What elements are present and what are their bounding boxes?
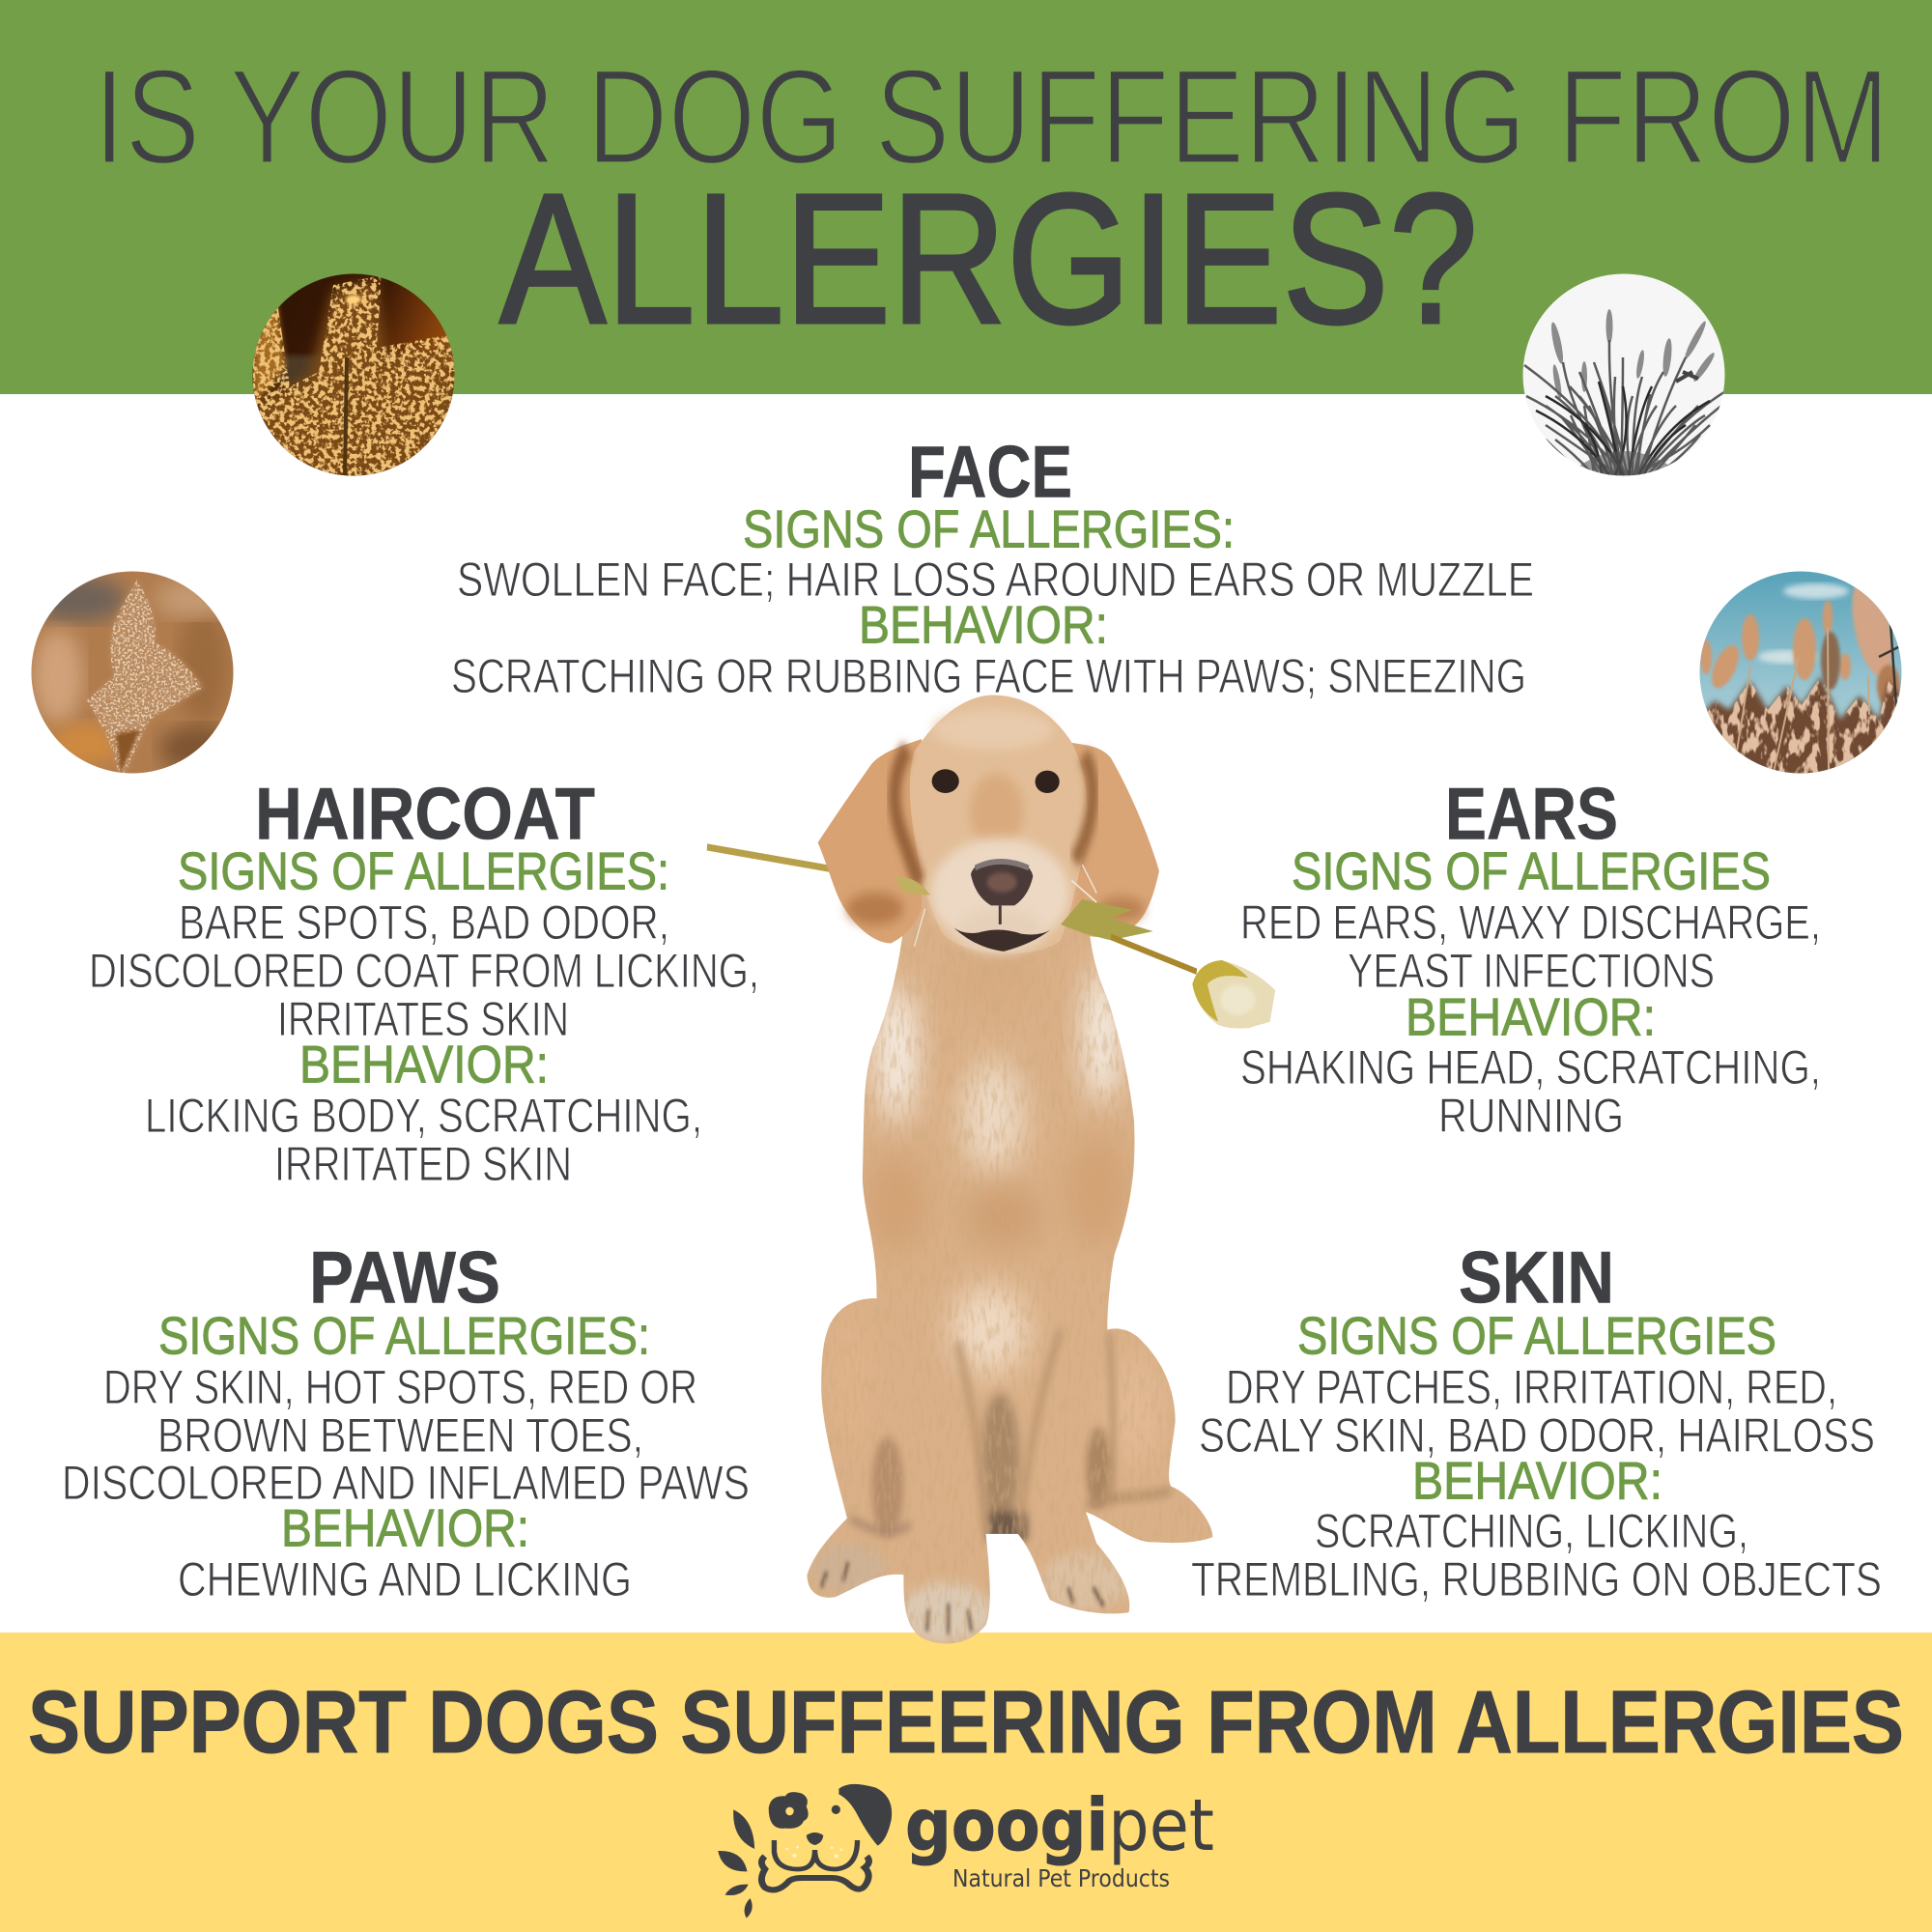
skin signs label: SIGNS OF ALLERGIES [1297,1306,1776,1366]
dog nose [971,860,1033,905]
haircoat signs text: IRRITATES SKIN [277,992,569,1046]
skin behavior label: BEHAVIOR: [1412,1451,1662,1511]
section: haircoat [89,773,759,1191]
reed plumes [1700,575,1900,707]
face behavior text: SCRATCHING OR RUBBING FACE WITH PAWS; SNEEZING [451,649,1526,703]
dog paws [810,1544,1130,1642]
haircoat behavior label: BEHAVIOR: [299,1034,549,1094]
face signs text: SWOLLEN FACE; HAIR LOSS AROUND EARS OR MUZZLE [457,553,1534,607]
tulip flower [1192,960,1275,1029]
photo circle: black and white grass [1520,272,1727,479]
logo wordmark: googipet [905,1784,1214,1867]
haircoat signs text: DISCOLORED COAT FROM LICKING, [89,944,759,998]
section: ears [1240,773,1821,1143]
paws signs text: BROWN BETWEEN TOES, [157,1408,643,1463]
paws signs text [62,1360,750,1510]
paws signs text: DISCOLORED AND INFLAMED PAWS [62,1456,750,1510]
dog body [808,874,1213,1644]
face heading: FACE [908,431,1072,514]
logo: googipet [718,1784,1214,1918]
haircoat behavior text [145,1089,702,1191]
section: skin [1191,1236,1882,1606]
green header band [0,0,1932,394]
logo tagline: Natural Pet Products [952,1864,1170,1892]
haircoat signs label: SIGNS OF ALLERGIES: [178,840,669,900]
paws behavior label: BEHAVIOR: [281,1497,529,1557]
dog ears [818,739,1159,943]
haircoat behavior text: LICKING BODY, SCRATCHING, [145,1089,702,1143]
paws signs label: SIGNS OF ALLERGIES: [158,1306,650,1366]
paws heading: PAWS [309,1236,500,1320]
ears behavior text: RUNNING [1438,1089,1624,1143]
grass seed heads [1549,309,1717,399]
dog mouth [953,927,1050,952]
ears behavior label: BEHAVIOR: [1406,987,1656,1047]
ears signs text [1240,895,1821,998]
skin behavior text: SCRATCHING, LICKING, [1315,1504,1748,1558]
tulip leaf and stem [895,865,1197,972]
logo icon: dog with bone and leaves [718,1784,892,1918]
face signs label: SIGNS OF ALLERGIES: [743,498,1235,558]
title line 2: ALLERGIES? [499,155,1478,362]
dog illustration [707,696,1275,1682]
paws behavior text: CHEWING AND LICKING [178,1552,632,1606]
haircoat signs text [89,895,759,1046]
photo circle: golden weeds [251,272,456,480]
section: face [451,431,1534,703]
dog leg contours [850,1330,1172,1534]
dog eyes [932,769,1060,793]
ears behavior text [1240,1040,1821,1143]
ears signs text: YEAST INFECTIONS [1348,944,1715,998]
haircoat heading: HAIRCOAT [255,773,595,856]
haircoat signs text: BARE SPOTS, BAD ODOR, [179,895,669,950]
section: paws [62,1236,750,1606]
haircoat behavior text: IRRITATED SKIN [274,1137,572,1191]
ears signs label: SIGNS OF ALLERGIES [1292,840,1771,900]
photo circle: pampas plume [29,570,237,777]
face behavior label: BEHAVIOR: [859,595,1108,655]
dog head [895,696,1093,953]
tulip stem left [707,847,928,893]
ears heading: EARS [1445,773,1618,856]
title [94,41,1889,362]
skin behavior text [1191,1504,1882,1606]
paws signs text: DRY SKIN, HOT SPOTS, RED OR [103,1360,697,1414]
photo circle: reeds and blue sky [1697,570,1908,777]
skin signs text [1199,1360,1875,1463]
skin heading: SKIN [1459,1236,1614,1320]
footer yellow band [0,1633,1932,1932]
